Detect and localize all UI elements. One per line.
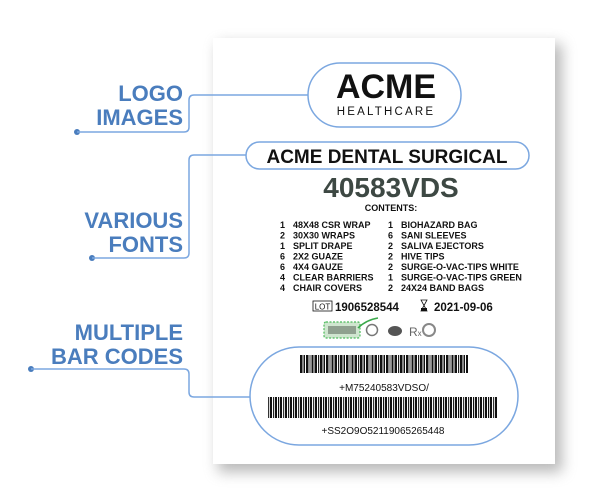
contents list: 2 (280, 230, 285, 240)
contents list: 48X48 CSR WRAP (293, 220, 371, 230)
contents list: 6 (388, 230, 393, 240)
callout: multiple bar codes: BAR CODES (51, 344, 183, 369)
barcode 1 (300, 355, 468, 373)
contents list: 30X30 WRAPS (293, 230, 355, 240)
contents list: 24X24 BAND BAGS (401, 283, 484, 293)
regulatory icons (324, 318, 435, 339)
callout: various fonts: VARIOUS (84, 208, 183, 233)
contents list: 4X4 GAUZE (293, 262, 343, 272)
contents list: 1 (280, 220, 285, 230)
regulatory icons: Rx (409, 325, 422, 339)
logo pill: ACME (336, 68, 436, 106)
label card (213, 38, 555, 464)
contents list: SPLIT DRAPE (293, 241, 353, 251)
contents list: 4 (280, 272, 285, 282)
callout: various fonts (84, 155, 246, 261)
barcode 2 (268, 397, 498, 418)
lot and expiry: LOT (315, 302, 330, 312)
callout: various fonts: FONTS (108, 232, 183, 257)
contents list: 1 (388, 220, 393, 230)
contents list: 6 (280, 252, 285, 262)
logo pill: HEALTHCARE (337, 106, 435, 118)
contents list: 1 (280, 241, 285, 251)
contents list: HIVE TIPS (401, 252, 445, 262)
contents list: 2 (388, 283, 393, 293)
lot and expiry: 2021-09-06 (434, 302, 493, 314)
contents list (280, 220, 522, 293)
callout: logo images (74, 81, 308, 135)
product code: 40583VDS (323, 172, 459, 203)
dental title pill: ACME DENTAL SURGICAL (266, 147, 508, 168)
lot and expiry: 1906528544 (335, 302, 400, 314)
lot and expiry (313, 300, 493, 314)
contents list: CLEAR BARRIERS (293, 272, 374, 282)
contents list: 4 (280, 283, 285, 293)
callout: logo images: LOGO (118, 81, 183, 106)
contents list: CHAIR COVERS (293, 283, 362, 293)
contents list: 2 (388, 252, 393, 262)
contents list: SALIVA EJECTORS (401, 241, 484, 251)
callout: multiple bar codes: MULTIPLE (75, 320, 183, 345)
barcode pill: +M75240583VDSO/ (339, 383, 429, 394)
contents list: 6 (280, 262, 285, 272)
contents list: SURGE-O-VAC-TIPS GREEN (401, 272, 522, 282)
logo pill (308, 63, 461, 127)
dental title pill (246, 142, 529, 169)
contents list: 2 (388, 241, 393, 251)
contents list: 2X2 GUAZE (293, 252, 343, 262)
contents list: BIOHAZARD BAG (401, 220, 478, 230)
barcode pill: +SS2O9O52119065265448 (322, 426, 445, 437)
contents list: SURGE-O-VAC-TIPS WHITE (401, 262, 519, 272)
contents list: SANI SLEEVES (401, 230, 467, 240)
contents list: 2 (388, 262, 393, 272)
barcode pill (250, 347, 518, 445)
contents heading: CONTENTS: (365, 203, 417, 213)
contents list: 1 (388, 272, 393, 282)
callout: logo images: IMAGES (96, 105, 183, 130)
callout: multiple bar codes (28, 320, 250, 397)
card shadow (218, 44, 562, 472)
